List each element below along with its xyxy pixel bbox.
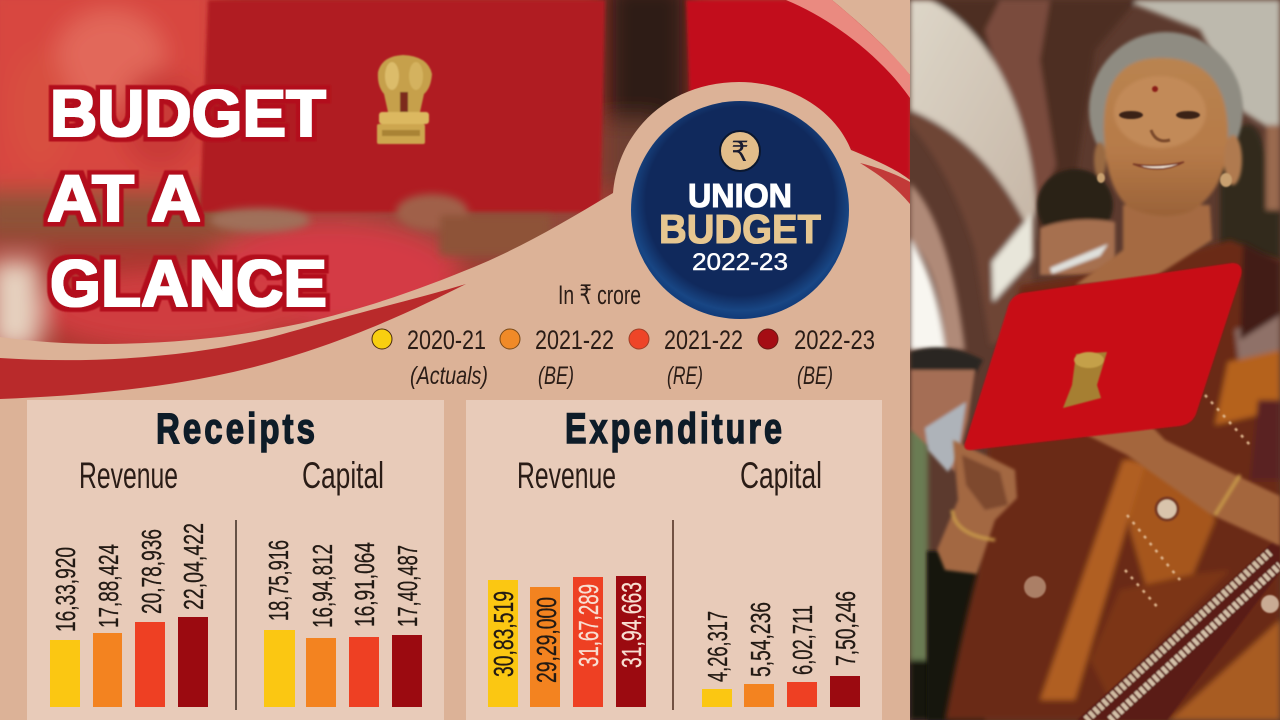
bar chart: expenditure revenue: 30,83,519 [488, 591, 519, 677]
icon: rupee coin [720, 131, 760, 171]
bar chart: expenditure revenue: 31,67,289 [573, 584, 604, 667]
icon: rupee coin: ₹ [731, 136, 749, 167]
bar chart: receipts revenue: 20,78,936 [136, 529, 167, 614]
subheading: expenditure revenue: Revenue [517, 455, 616, 496]
bar chart: expenditure capital: 7,50,246 [830, 591, 861, 666]
title: AT A [47, 161, 201, 235]
legend: (Actuals) [410, 362, 488, 390]
woman facial features [1097, 86, 1232, 187]
bar chart: receipts revenue: 16,33,920 [50, 547, 81, 632]
bar chart: receipts revenue: 17,88,424 [93, 544, 124, 628]
title [47, 76, 327, 320]
badge: Union Budget 2022-23: 2022-23 [692, 249, 788, 276]
bar chart: expenditure revenue: 29,29,000 [531, 597, 562, 683]
bar chart: expenditure capital [702, 591, 861, 707]
saree [945, 240, 1280, 720]
red folder with gold emblem [964, 263, 1242, 450]
bar chart: expenditure revenue: 31,94,663 [616, 582, 647, 668]
bar chart: receipts capital [263, 540, 423, 707]
bar chart: receipts capital: 16,91,064 [349, 542, 380, 627]
bar chart: expenditure capital: 6,02,711 [787, 605, 818, 675]
woman head and neck [1075, 32, 1243, 285]
bar chart: expenditure capital: 4,26,317 [702, 611, 733, 682]
bar chart: receipts revenue [50, 523, 209, 707]
badge: Union Budget 2022-23: BUDGET [659, 206, 821, 252]
bar chart: expenditure revenue [488, 576, 647, 707]
legend: 2021-22 [664, 325, 743, 355]
icon: gold state emblem on folder [377, 55, 432, 144]
bystander at left [911, 348, 985, 720]
legend: (BE) [538, 362, 574, 390]
legend: 2020-21 [407, 325, 486, 355]
photo: red budget folder held in hands [0, 0, 910, 344]
bar chart: expenditure capital: 5,54,236 [745, 602, 776, 677]
saree border [1024, 498, 1280, 720]
badge: Union Budget 2022-23 [631, 101, 849, 319]
photo: finance minister holding red budget folder [910, 0, 1280, 720]
right corner swoosh [786, 0, 910, 204]
woman hands and arms [937, 410, 1280, 574]
panel: receipts [27, 400, 444, 720]
saree sequin dots [1125, 395, 1250, 610]
heading: expenditure: Expenditure [565, 405, 785, 453]
subheading: receipts capital: Capital [302, 455, 384, 496]
legend: 2021-22 [535, 325, 614, 355]
legend: (BE) [797, 362, 833, 390]
subheading: expenditure capital: Capital [740, 455, 822, 496]
legend: (RE) [667, 362, 703, 390]
bar chart: receipts capital: 16,94,812 [307, 544, 338, 628]
title: BUDGET [50, 76, 326, 150]
legend [372, 325, 875, 390]
photo background: sandstone arches [910, 0, 1280, 720]
left infographic background [0, 0, 910, 720]
heading: receipts: Receipts [156, 405, 318, 453]
beige curved background with badge hump [0, 0, 910, 400]
bystander behind [1037, 169, 1115, 275]
panel: expenditure [466, 400, 882, 720]
title: GLANCE [50, 246, 327, 320]
bar chart: receipts capital: 17,40,487 [392, 545, 423, 627]
unit note: In ₹ crore [558, 280, 641, 310]
red lower swoosh [0, 284, 466, 399]
bar chart: receipts capital: 18,75,916 [263, 540, 294, 621]
bar chart: receipts revenue: 22,04,422 [178, 523, 209, 610]
legend: 2022-23 [794, 325, 875, 355]
badge: Union Budget 2022-23: UNION [688, 177, 792, 214]
subheading: receipts revenue: Revenue [79, 455, 178, 496]
